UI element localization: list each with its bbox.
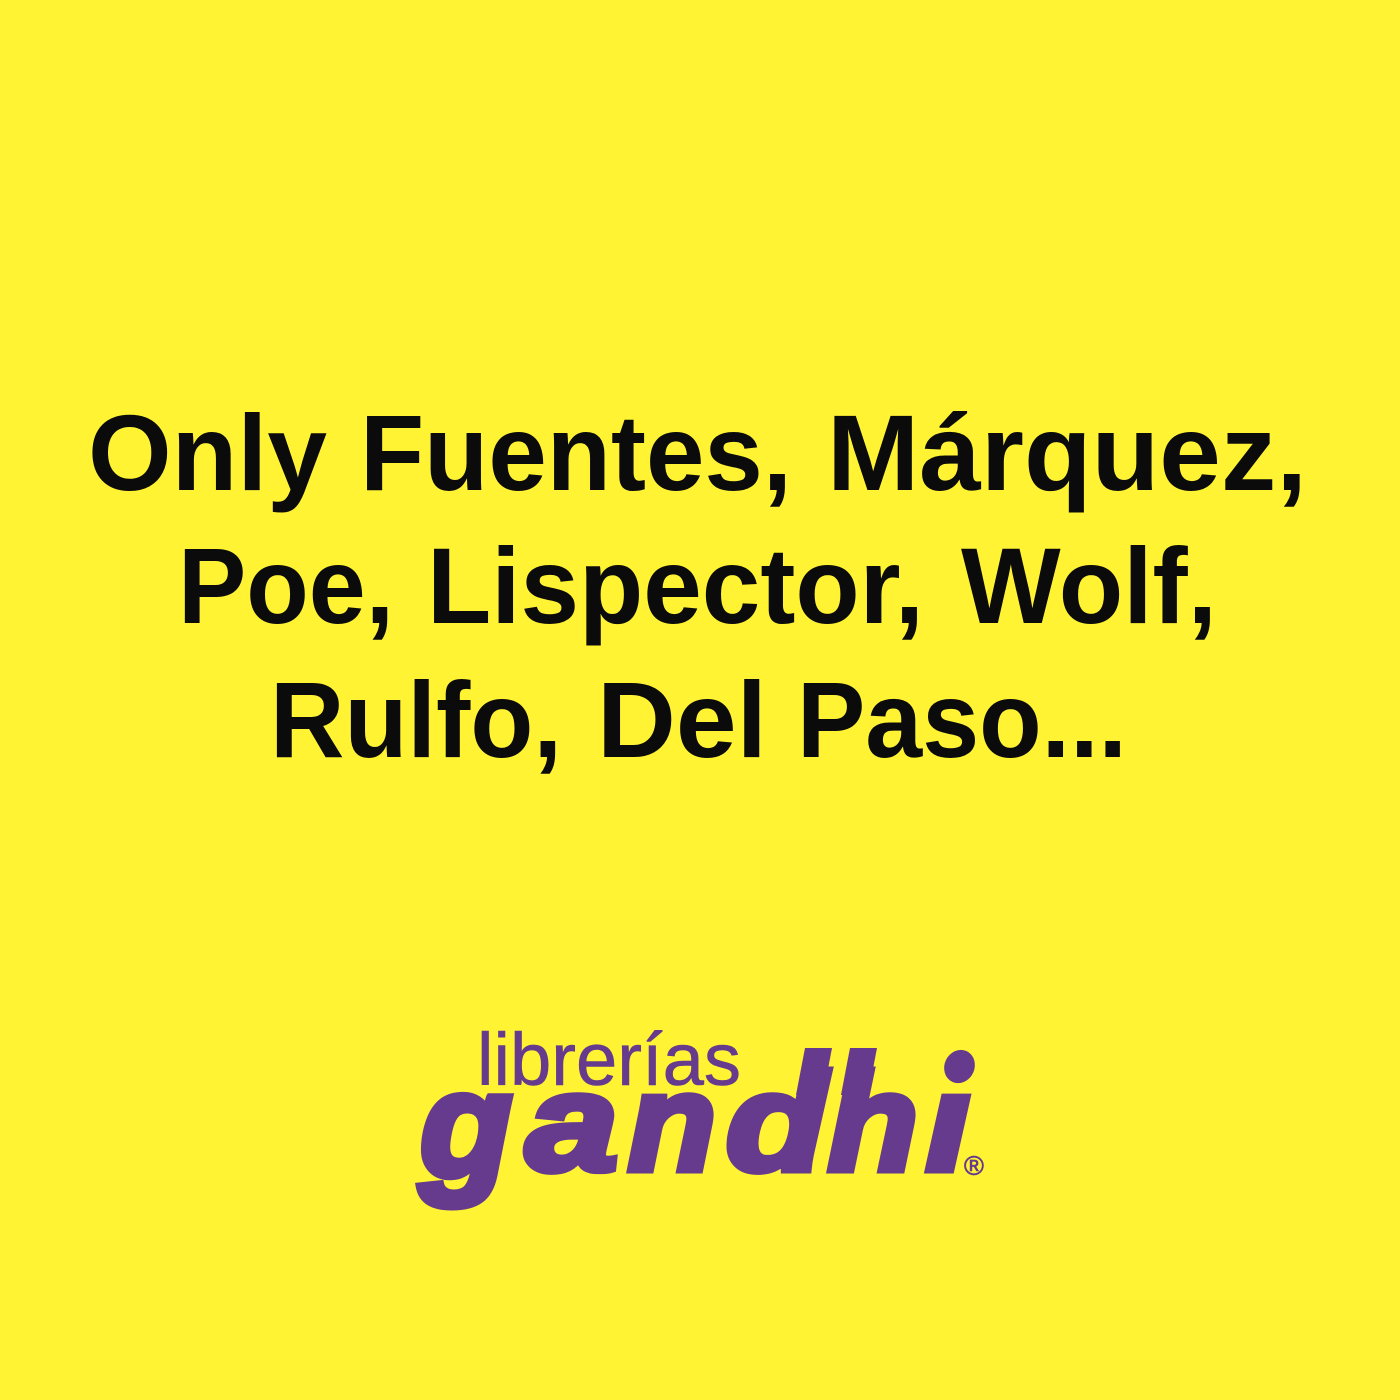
heading: author list: Rulfo, xyxy=(270,659,562,780)
heading: author list: Paso... xyxy=(797,659,1127,780)
i dot mask xyxy=(925,1040,990,1093)
heading: author list: Wolf, xyxy=(961,525,1217,646)
heading: author list: Only xyxy=(88,392,327,513)
heading: author list: Del xyxy=(597,659,767,780)
logo wordmark: gandhi: n xyxy=(628,1046,716,1200)
logo wordmark: gandhi: h xyxy=(828,1046,918,1200)
i dot xyxy=(939,1045,980,1088)
logo wordmark: gandhi: d xyxy=(726,1046,829,1200)
heading: author list: Fuentes, xyxy=(360,392,792,513)
heading: author list xyxy=(88,392,1307,780)
logo: librerías gandhi xyxy=(419,1018,990,1208)
heading: author list: Lispector, xyxy=(427,525,924,646)
logo wordmark: gandhi: g xyxy=(419,1042,512,1208)
logo wordmark: gandhi: a xyxy=(526,1046,618,1200)
logo wordmark: gandhi: i xyxy=(926,1046,973,1200)
heading: author list: Poe, xyxy=(178,525,394,646)
registered mark: ® xyxy=(964,1151,984,1181)
ascender extensions for d and h xyxy=(796,1048,877,1095)
logo wordmark: librerías: librerías xyxy=(477,1018,741,1101)
heading: author list: Márquez, xyxy=(827,392,1307,513)
logo wordmark: gandhi xyxy=(419,1042,973,1208)
